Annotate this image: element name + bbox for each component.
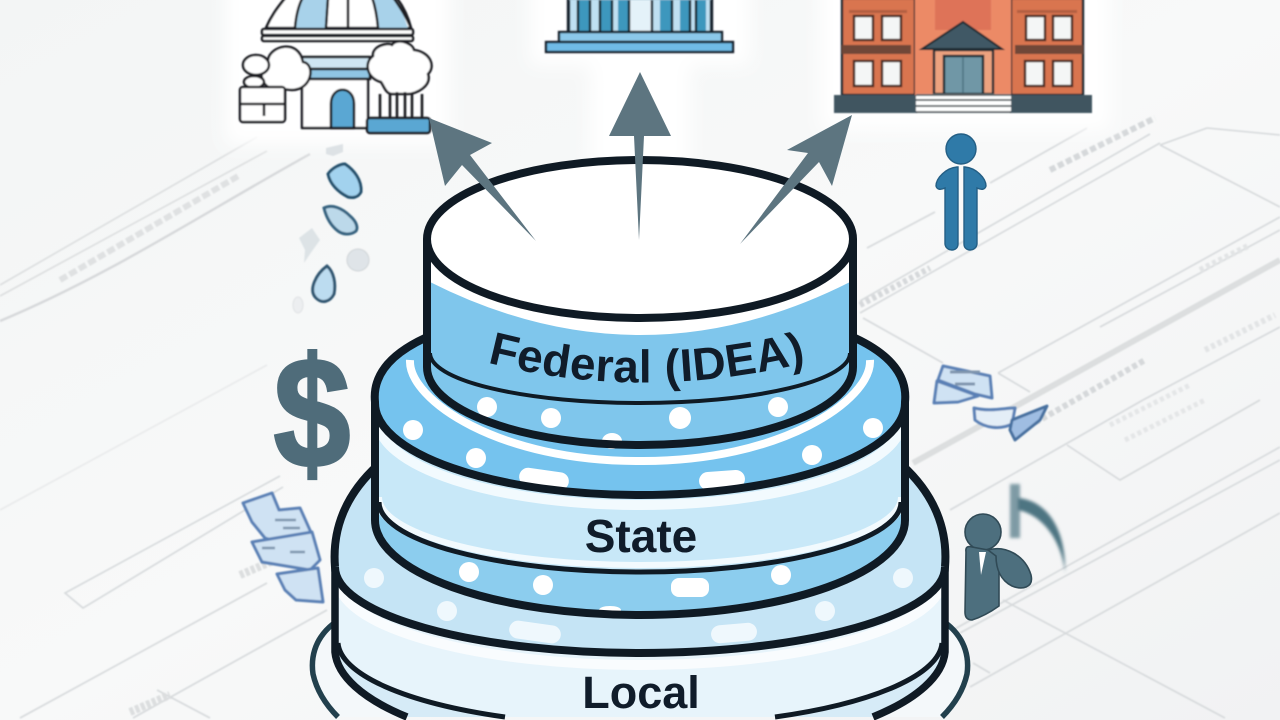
federal top — [427, 160, 853, 318]
lower band dots — [459, 562, 791, 614]
briefcase — [240, 87, 285, 122]
icon: domed government building — [240, 0, 432, 133]
coin: blue 2 — [324, 206, 357, 234]
coin: grey top — [326, 144, 343, 156]
label: State: State — [585, 510, 697, 562]
local base skirt — [335, 650, 945, 717]
white crescent — [410, 360, 870, 461]
windows — [854, 16, 1072, 86]
coin: grey 1 — [299, 228, 320, 263]
thin highlights — [379, 497, 901, 565]
highlight under rim — [338, 579, 942, 665]
tier: Local — [335, 465, 945, 717]
rim dots — [403, 418, 883, 491]
bottom plate — [312, 624, 968, 717]
icon: seated slate person — [965, 514, 1031, 620]
tier: State — [375, 338, 905, 615]
arrow: up-right to school — [740, 115, 852, 244]
cloud shrubs — [262, 47, 311, 90]
tree — [368, 41, 432, 94]
coin: grey 3 — [293, 297, 303, 313]
fountain plinth — [367, 118, 430, 133]
coin: blue 1 — [328, 164, 361, 197]
state side — [375, 405, 905, 572]
tier: Federal — [427, 160, 853, 449]
icon: money pile left — [243, 493, 323, 602]
falling coins — [293, 144, 369, 313]
icon: columned federal building — [546, 0, 733, 52]
white halos behind top icons — [225, 0, 1110, 170]
coin: blue 3 — [313, 266, 335, 301]
porch — [934, 50, 993, 94]
label: Federal (IDEA): Federal (IDEA) — [490, 332, 802, 392]
state bottom band — [375, 500, 905, 615]
layered funding cake — [310, 156, 970, 720]
arrow: up to centre building — [609, 72, 671, 240]
federal bottom band dots — [477, 397, 788, 449]
rim dots — [364, 568, 913, 645]
local rim — [335, 465, 945, 653]
federal side — [427, 239, 853, 445]
coin: grey 2 — [347, 249, 369, 271]
icon: money pile right — [934, 366, 1047, 440]
icon: red brick school — [834, 0, 1092, 113]
state rim — [375, 338, 905, 495]
arrow: up-left to domed building — [429, 118, 536, 241]
icon: blue standing person — [936, 134, 986, 250]
plate outline — [312, 624, 968, 717]
label: Local: Local — [582, 667, 700, 718]
local side — [335, 567, 945, 717]
icon: dollar sign: $ — [274, 326, 350, 501]
arrow: curved motion swish — [1010, 484, 1065, 572]
